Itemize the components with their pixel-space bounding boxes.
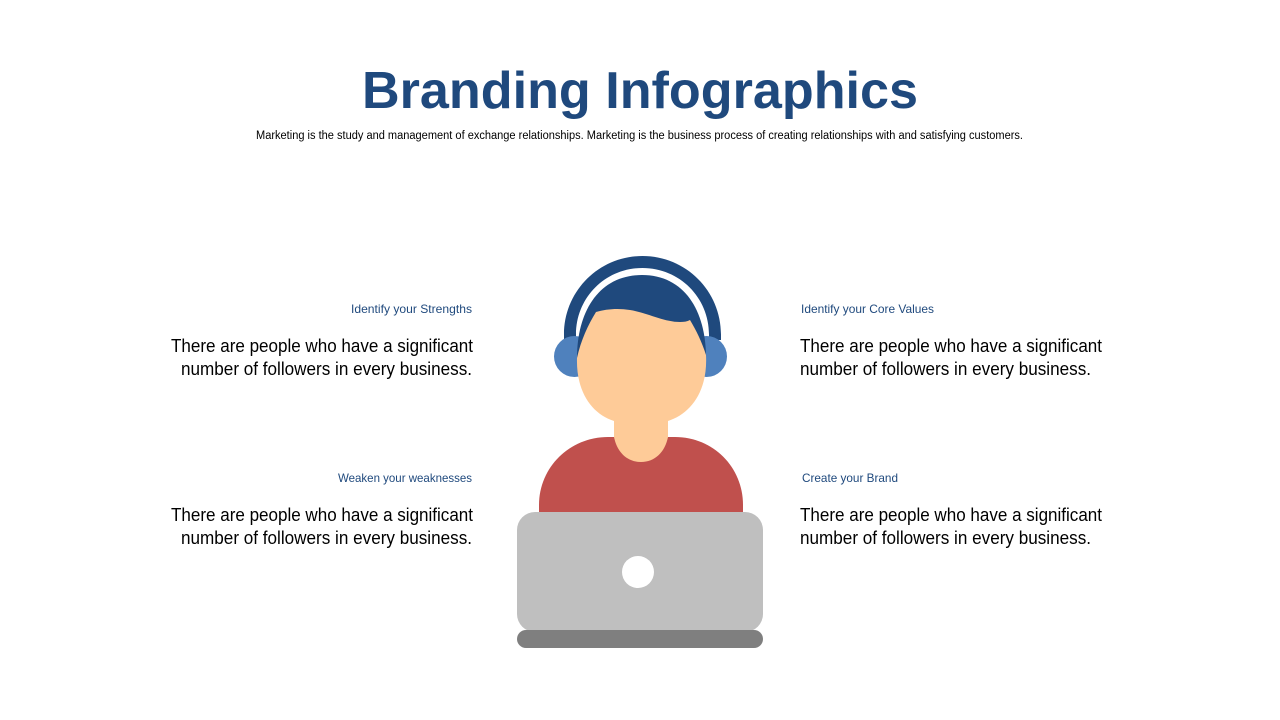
- text block: Identify your Strengths: [171, 302, 473, 379]
- subtitle: Marketing is the study and management of exchange relationships. Marketing is the business process of creating relationships with and satisfying customers.: [256, 130, 1023, 142]
- person with headphones and laptop: [517, 256, 763, 648]
- icon: laptop screen: [517, 512, 763, 632]
- text block: Weaken your weaknesses: Weaken your weaknesses: [338, 471, 472, 485]
- title: Branding Infographics: [362, 62, 918, 120]
- icon: left ear cup: [554, 336, 595, 377]
- text block: Create your Brand: [800, 471, 1102, 548]
- text block: Weaken your weaknesses: [171, 471, 473, 548]
- text block: Weaken your weaknesses: number of followers in every business.: [181, 528, 472, 548]
- text block: Weaken your weaknesses: There are people who have a significant: [171, 505, 473, 525]
- text block: Identify your Core Values: number of followers in every business.: [800, 359, 1091, 379]
- text block: Identify your Core Values: There are people who have a significant: [800, 336, 1102, 356]
- icon: face and neck: [577, 309, 706, 462]
- icon: laptop base: [517, 630, 763, 648]
- icon: shirt: [539, 437, 743, 514]
- text block: Identify your Core Values: Identify your Core Values: [801, 302, 934, 316]
- icon: right ear cup: [686, 336, 727, 377]
- icon: headphone band: [564, 256, 721, 340]
- icon: laptop logo: [622, 556, 654, 588]
- text block: Identify your Strengths: number of followers in every business.: [181, 359, 472, 379]
- text block: Identify your Strengths: There are people who have a significant: [171, 336, 473, 356]
- icon: hair: [577, 275, 706, 358]
- text block: Create your Brand: number of followers in every business.: [800, 528, 1091, 548]
- text block: Create your Brand: Create your Brand: [802, 471, 898, 485]
- text block: Create your Brand: There are people who have a significant: [800, 505, 1102, 525]
- text block: Identify your Strengths: Identify your Strengths: [351, 302, 472, 316]
- text block: Identify your Core Values: [800, 302, 1102, 379]
